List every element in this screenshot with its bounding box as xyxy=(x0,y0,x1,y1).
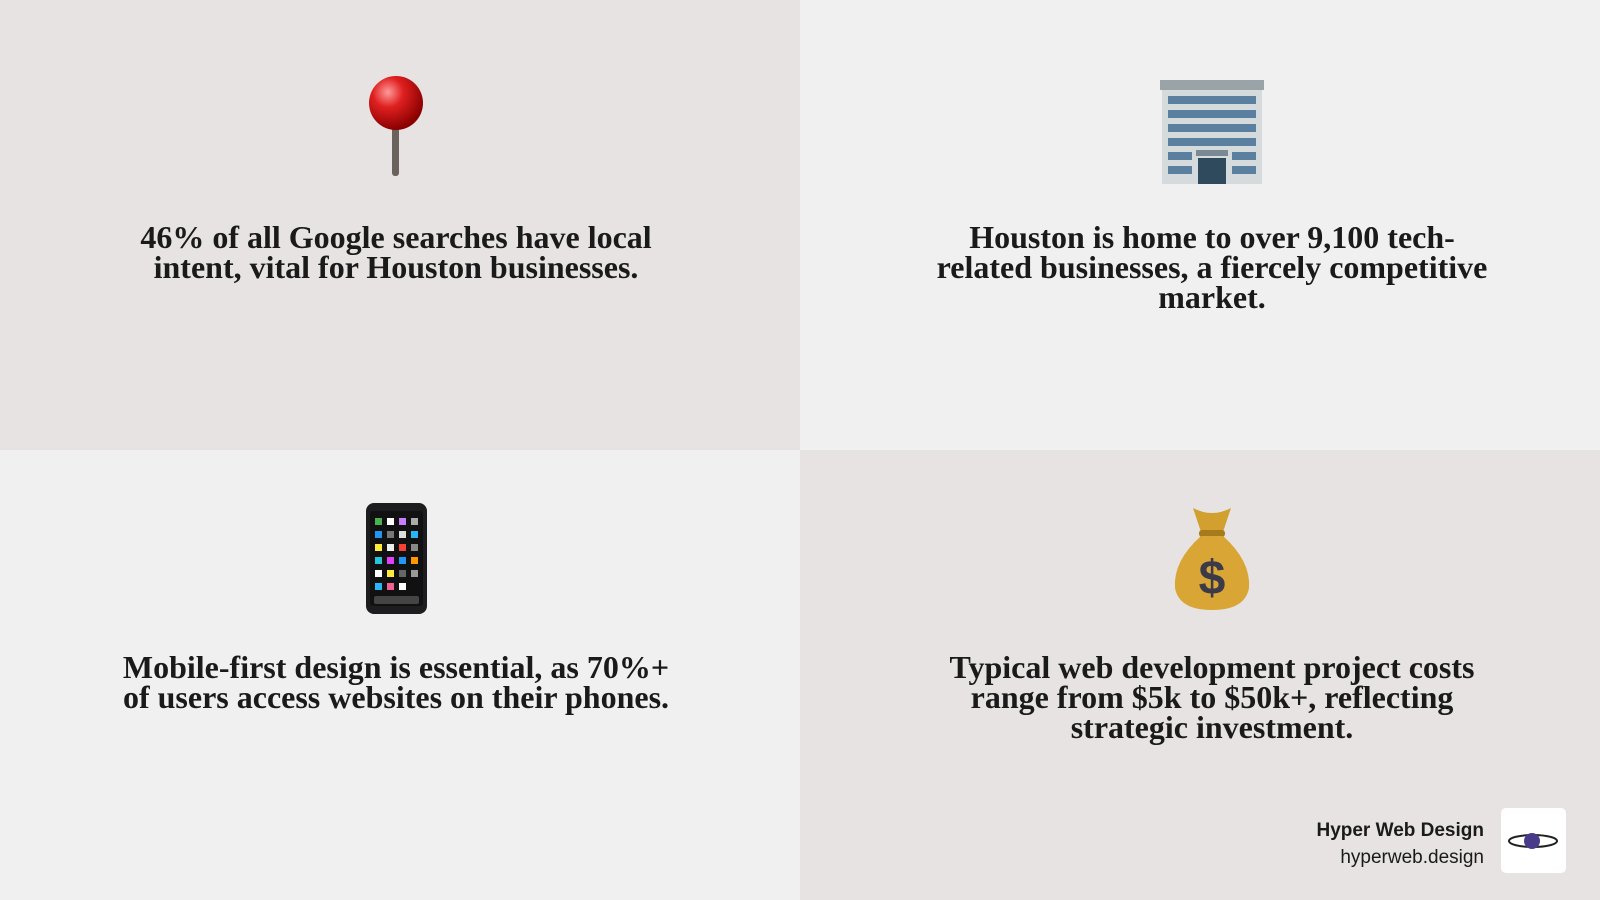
icon: pushpin xyxy=(369,76,423,176)
text: brand name and url xyxy=(1316,820,1484,868)
icon: mobile phone xyxy=(366,503,427,614)
panel: mobile-first xyxy=(0,450,800,900)
text: mobile stat: Mobile-first design is essential, as 70%+ xyxy=(123,649,669,685)
text: tech business stat: market. xyxy=(1158,279,1266,315)
icon: money bag xyxy=(1174,508,1250,610)
text: tech business stat xyxy=(937,219,1487,315)
text: local search stat xyxy=(140,219,652,285)
panel: tech businesses xyxy=(800,0,1600,450)
icon: office building xyxy=(1160,80,1264,184)
text: mobile stat: of users access websites on their phones. xyxy=(123,679,669,715)
logo xyxy=(1501,808,1566,873)
text: tech business stat: Houston is home to over 9,100 tech- xyxy=(969,219,1455,255)
text: local search stat: intent, vital for Houston businesses. xyxy=(154,249,638,285)
text: cost stat xyxy=(950,649,1474,745)
panel: project costs xyxy=(800,450,1600,900)
branding: Hyper Web Design xyxy=(1316,808,1566,873)
text: brand name and url: Hyper Web Design xyxy=(1316,820,1484,841)
text: cost stat: strategic investment. xyxy=(1071,709,1353,745)
text: tech business stat: related businesses, a fiercely competitive xyxy=(937,249,1487,285)
icon: money bag: $ xyxy=(1199,552,1226,605)
text: cost stat: Typical web development project costs xyxy=(950,649,1474,685)
panel: local search xyxy=(0,0,800,450)
text: mobile stat xyxy=(123,649,669,715)
text: brand name and url: hyperweb.design xyxy=(1340,847,1484,868)
text: cost stat: range from $5k to $50k+, reflecting xyxy=(971,679,1453,715)
text: local search stat: 46% of all Google searches have local xyxy=(140,219,652,255)
